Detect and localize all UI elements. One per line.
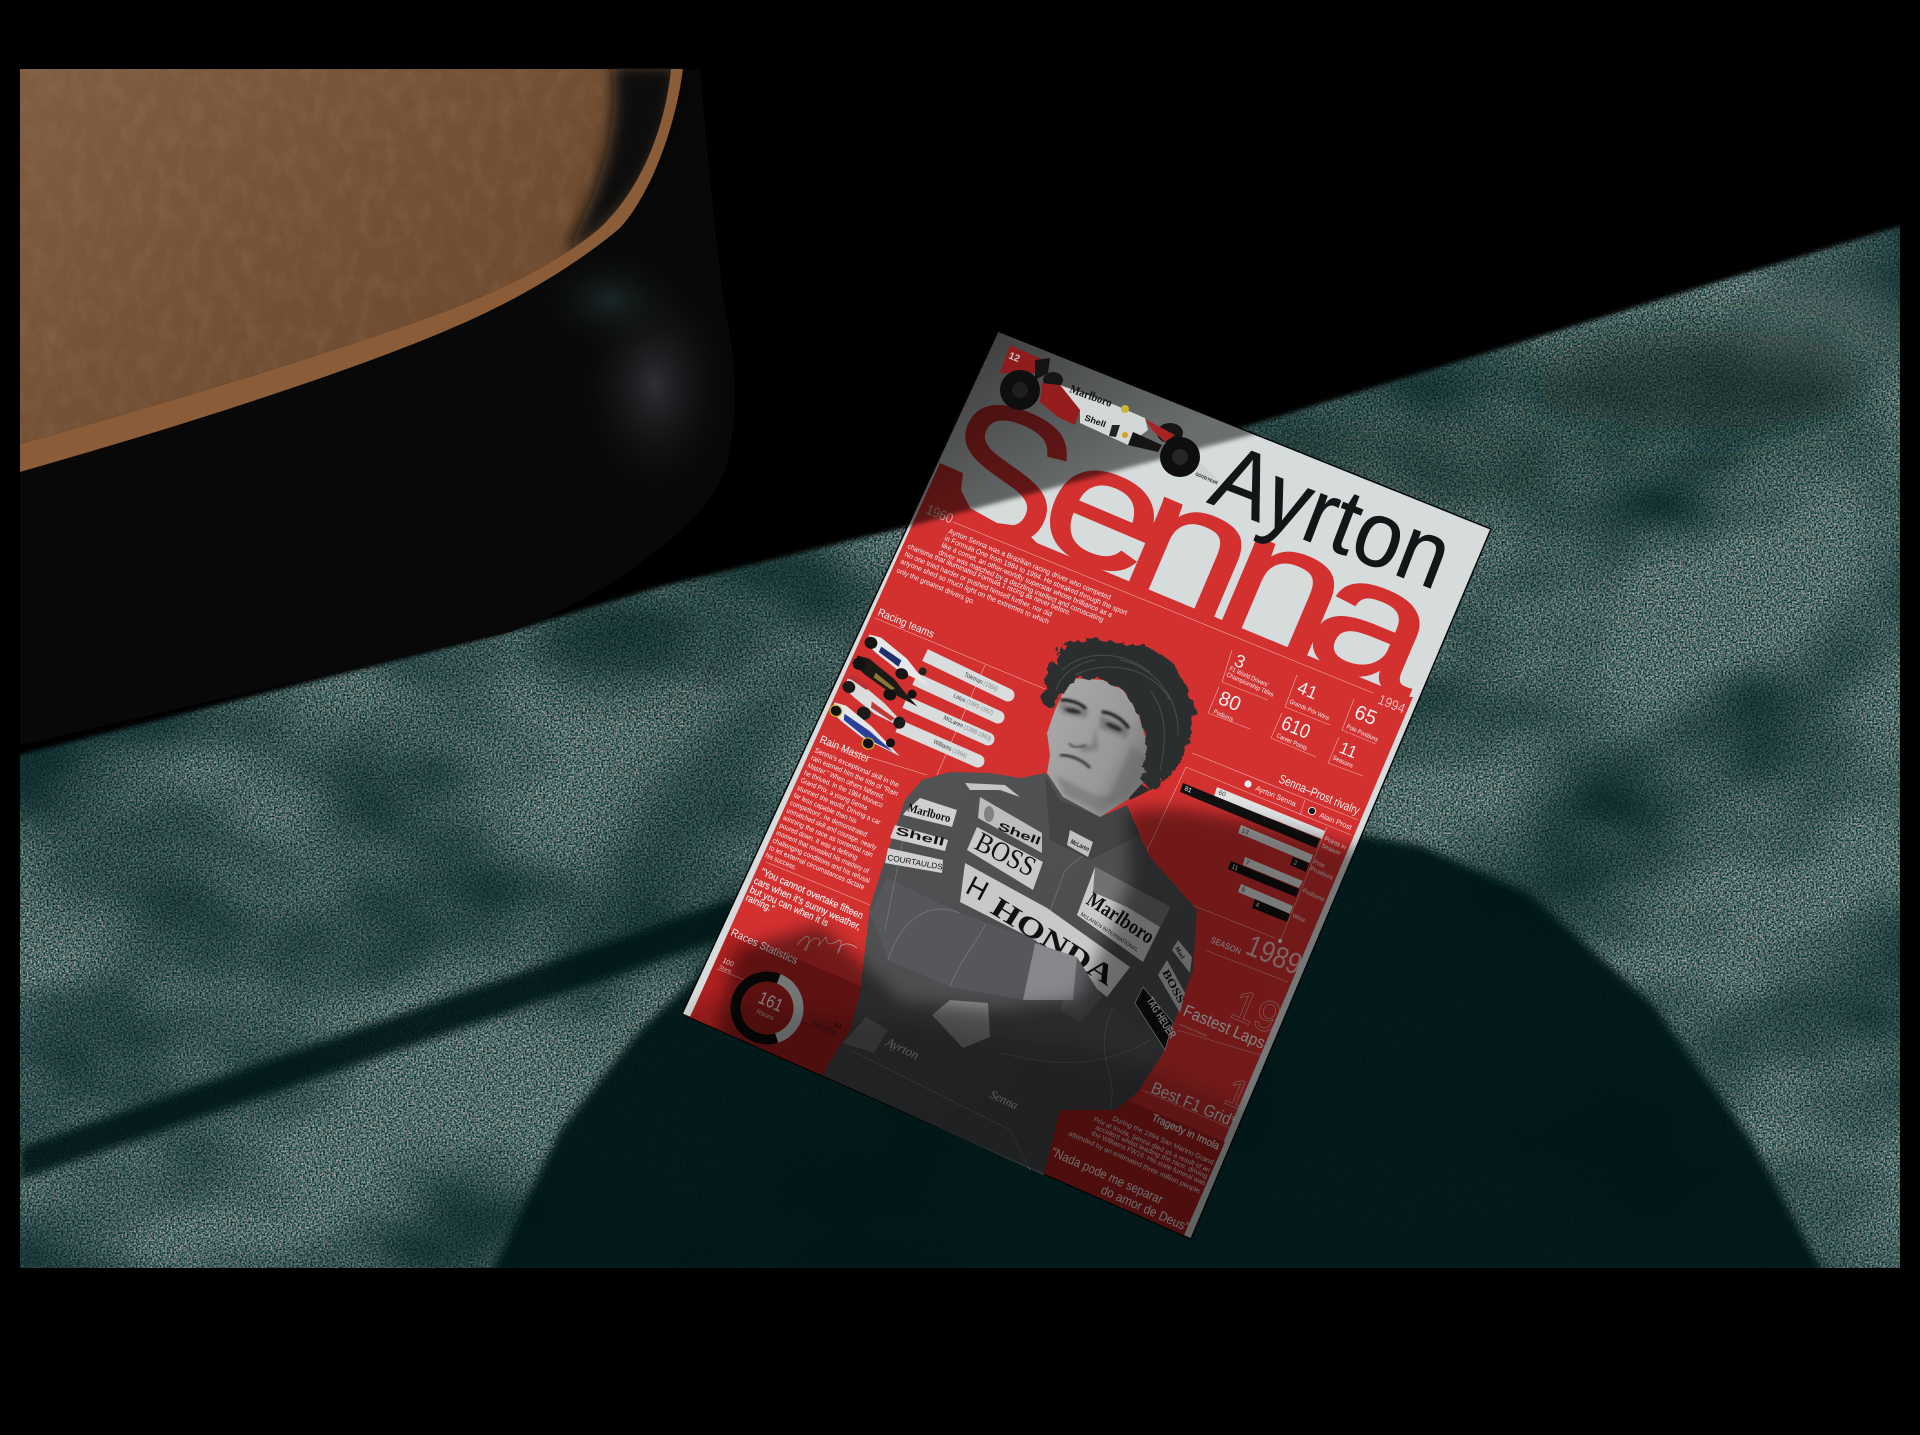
bars: pole positions: 13 bbox=[1240, 827, 1250, 837]
stat: pole positions: 65 bbox=[1351, 701, 1380, 730]
arm patch: Marlboro: Marl bbox=[1173, 946, 1185, 961]
stat: seasons: 11 bbox=[1336, 738, 1360, 762]
rain master text: challenging conditions and his refusal bbox=[771, 836, 872, 885]
donut chart: Races bbox=[755, 1008, 776, 1023]
pill labels: Toleman (1984) bbox=[963, 671, 999, 693]
rain master text: he thrived. In the 1984 Monaco bbox=[803, 768, 884, 810]
heading: races statistics: Races Statistics bbox=[729, 927, 800, 967]
best grid stat: Best F1 Grid* bbox=[1148, 1078, 1240, 1131]
shadow: upper dark area bbox=[0, 60, 1920, 760]
label: starts: 100 bbox=[721, 957, 735, 969]
stat: pole positions bbox=[1342, 699, 1380, 744]
bars: points in season: 81 bbox=[1183, 785, 1193, 795]
heading: tragedy in Imola: Tragedy in Imola bbox=[1150, 1112, 1221, 1152]
sleeve patch: Courtaulds bbox=[885, 848, 943, 873]
intro text: Ayrton Senna was a Brazilian racing driver who competed bbox=[947, 527, 1112, 602]
rain master text: far less capable than his bbox=[792, 791, 859, 826]
dark red lower band bbox=[690, 930, 1225, 1235]
embroidered name: Senna: Senna bbox=[988, 1087, 1020, 1112]
rain master text: rain earned him the title of "Rain bbox=[810, 753, 900, 798]
rain master text: moment that revealed his mastery of bbox=[775, 828, 870, 875]
sleeve patch: Marlboro: Marlboro bbox=[906, 800, 952, 825]
ear bbox=[1142, 744, 1172, 780]
stat: world titles: 3 bbox=[1231, 650, 1248, 673]
bars: podiums bbox=[1228, 857, 1325, 903]
suit cuff bbox=[1023, 943, 1077, 1000]
senna quote: raining." bbox=[744, 893, 776, 915]
best grid stat: 1 bbox=[1218, 1070, 1256, 1119]
sleeve patch: Shell bbox=[890, 825, 948, 851]
fastest laps stat: 19 bbox=[1224, 980, 1288, 1044]
intro text bbox=[895, 527, 1129, 626]
bars: pole positions: Pole bbox=[1312, 859, 1326, 870]
eyebrows bbox=[1062, 700, 1128, 727]
donut chart: 161 bbox=[755, 987, 786, 1016]
bars: pole positions: Positions bbox=[1309, 866, 1334, 882]
stat: pole positions: Pole Positions bbox=[1345, 723, 1379, 744]
McLaren F1 car illustration: GOODYEAR bbox=[1195, 471, 1219, 486]
shoulder stripe bbox=[965, 783, 1020, 797]
rain master text: Master." When others faltered, bbox=[806, 761, 886, 801]
poster sheet bbox=[681, 332, 1492, 1240]
timeline 1960 to 1994: 1994 bbox=[1376, 691, 1408, 717]
stat: world titles bbox=[1222, 650, 1275, 700]
bag tan leather top bbox=[20, 69, 671, 444]
chest patch: Marlboro: McLAREN INTERNATIONAL bbox=[1079, 912, 1139, 954]
bars: wins: Wins bbox=[1291, 913, 1306, 924]
racing teams section bbox=[820, 607, 1045, 775]
heading: racing teams: Racing teams bbox=[876, 607, 936, 641]
timeline 1960 to 1994 bbox=[924, 501, 1408, 717]
bars: points in season: Season bbox=[1320, 843, 1341, 857]
label: retirements: Retirements bbox=[812, 1020, 838, 1036]
rain master text bbox=[764, 746, 901, 892]
rain master section bbox=[744, 734, 901, 953]
intro text: anyone shed so much light on the extremes to which bbox=[899, 557, 1050, 626]
senna quote: cars when it's sunny weather, bbox=[752, 876, 862, 933]
car: Toleman bbox=[856, 632, 937, 691]
pill round ends bbox=[972, 688, 1014, 768]
car: Williams bbox=[821, 700, 910, 763]
lower arm bbox=[990, 1007, 1163, 1080]
neck collar bbox=[1045, 775, 1140, 860]
intro text: charisma that illuminated Formula 1 racing as never before. bbox=[906, 542, 1072, 617]
main wheels bbox=[1000, 370, 1040, 410]
shadow: diagonal bar across carpet bbox=[20, 897, 735, 1180]
belt badge bbox=[843, 1017, 888, 1053]
tragedy text: During the 1994 San Marino Grand bbox=[1111, 1115, 1215, 1167]
bars: podiums: 7 bbox=[1244, 859, 1251, 867]
nose bbox=[1069, 743, 1086, 747]
carpet floor bbox=[20, 224, 1900, 1268]
pill labels bbox=[932, 671, 999, 760]
arm patch: BOSS: BOSS bbox=[1159, 968, 1187, 1005]
stat: seasons: Seasons bbox=[1331, 754, 1354, 770]
suit stitching bbox=[850, 830, 1150, 1170]
label: retirements bbox=[803, 1020, 843, 1036]
stat: podiums: Podiums bbox=[1212, 708, 1234, 723]
legend bbox=[1244, 780, 1353, 832]
red panel bbox=[690, 463, 1413, 1235]
portuguese quote: do amor de Deus" bbox=[1099, 1182, 1192, 1235]
stat: grands prix wins: 41 bbox=[1294, 677, 1321, 703]
intro text: No one tried harder or pushed himself further, nor did bbox=[903, 550, 1054, 619]
portuguese quote: "Nada pode me separar bbox=[1049, 1144, 1166, 1207]
Senna-Prost rivalry chart bbox=[1145, 753, 1362, 943]
McLaren F1 car illustration bbox=[1000, 345, 1220, 486]
embroidered name: Ayrton: Ayrton bbox=[883, 1034, 921, 1062]
chest patch: HONDA bbox=[960, 863, 1130, 997]
rain master text: winning the race as torrential rain bbox=[781, 813, 875, 859]
glove bbox=[932, 1000, 990, 1048]
season 1989 label: 1989 bbox=[1241, 929, 1307, 982]
label: starts: Starts bbox=[718, 964, 733, 975]
shadow band over poster top bbox=[908, 332, 1257, 530]
bars: wins bbox=[1238, 884, 1306, 924]
hair strands bbox=[1056, 655, 1178, 770]
senna quote: but you can when it is bbox=[748, 885, 830, 929]
bars: podiums: Podiums bbox=[1301, 888, 1325, 903]
tragedy text: the Williams FW16. His state funeral was bbox=[1090, 1130, 1207, 1187]
shadow dome over poster bottom bbox=[710, 798, 1358, 1238]
rain master text: stunned the world. Driving a car bbox=[796, 783, 883, 827]
legend: Ayrton Senna bbox=[1254, 784, 1298, 809]
arm patch: TAG Heuer: TAG HEUER bbox=[1143, 995, 1178, 1041]
tragedy text: Prix at Imola, Senna died as a result of an bbox=[1092, 1116, 1211, 1175]
title: Senna: enna bbox=[1016, 397, 1467, 732]
arm patch: TAG Heuer bbox=[1135, 987, 1178, 1050]
portrait of Ayrton Senna bbox=[822, 638, 1197, 1175]
tragedy in Imola block bbox=[1049, 1112, 1221, 1235]
fastest laps stat bbox=[1177, 980, 1288, 1055]
pill labels: McLaren (1988-1993) bbox=[942, 714, 992, 743]
label: starts bbox=[717, 957, 745, 980]
stat: career points bbox=[1271, 712, 1316, 757]
bars: wins: 4 bbox=[1254, 901, 1261, 909]
bottom deeper shade bbox=[683, 997, 1246, 1238]
sleeve patch: Shell: Shell bbox=[894, 825, 946, 849]
stat: career points: Career Points bbox=[1275, 732, 1308, 752]
stat: seasons bbox=[1328, 737, 1363, 776]
rain master text: Senna's exceptional skill in the bbox=[813, 746, 901, 789]
mouth bbox=[1060, 755, 1090, 768]
fastest laps stat: Season with the most fastest laps bbox=[1179, 1022, 1208, 1038]
car: Lotus bbox=[844, 653, 927, 712]
bars: points in season: Points in bbox=[1323, 836, 1347, 851]
career stats grid bbox=[1208, 650, 1380, 776]
chest patch: Marlboro bbox=[1077, 867, 1170, 962]
far wheels bbox=[1043, 372, 1063, 388]
hair back bbox=[1120, 770, 1150, 800]
rain master text: unmatched skill and courage, nearly bbox=[785, 806, 878, 852]
bag piping bbox=[20, 69, 683, 472]
dark fold of leather bbox=[565, 64, 680, 254]
sleeve patch: Courtaulds: COURTAULDS bbox=[887, 853, 943, 872]
arm patch: Marlboro bbox=[1172, 940, 1192, 973]
intro text: only the greatest drivers go. bbox=[895, 566, 976, 606]
races statistics panel bbox=[717, 927, 843, 1040]
fastest laps stat: Fastest Laps bbox=[1180, 1001, 1268, 1053]
donut chart bbox=[736, 977, 799, 1040]
stat: world titles: F1 World Drivers' bbox=[1228, 665, 1269, 689]
bars: pole positions bbox=[1238, 825, 1334, 882]
stat: world titles: Championship Titles bbox=[1225, 671, 1275, 699]
rear wing bbox=[1000, 345, 1048, 373]
bars: points in season: 60 bbox=[1217, 789, 1227, 799]
leather bag bbox=[20, 68, 729, 652]
lighter crossed arm bbox=[870, 878, 1035, 1000]
face bbox=[1047, 678, 1150, 817]
crossed hand bbox=[1060, 957, 1102, 1023]
shadow: round dome on carpet bbox=[490, 810, 1825, 1275]
tragedy text: accident whilst leading the race, driving bbox=[1094, 1124, 1209, 1180]
legend: Alain Prost bbox=[1318, 811, 1353, 832]
chart title: Senna–Prost rivalry bbox=[1277, 772, 1362, 818]
face shading bbox=[1055, 702, 1148, 812]
chest patch: HONDA: H bbox=[961, 870, 994, 907]
chest patch: BOSS: BOSS bbox=[970, 827, 1041, 883]
goodyear fin bbox=[1195, 460, 1220, 482]
race suit bbox=[822, 772, 1197, 1175]
rain master text: competitors', he demonstrated bbox=[789, 798, 869, 839]
senna quote: "You cannot overtake fifteen bbox=[759, 867, 865, 922]
intro text: driver was matched by a dazzling intellect and coruscating bbox=[937, 548, 1105, 624]
McLaren F1 car illustration: Shell bbox=[1083, 412, 1107, 429]
car: McLaren bbox=[833, 672, 918, 739]
signature bbox=[797, 936, 857, 953]
season 1989 label: SEASON bbox=[1209, 935, 1243, 956]
chest patch: Shell bbox=[978, 797, 1042, 853]
eyes bbox=[1065, 707, 1123, 733]
poster paper bbox=[682, 331, 1491, 1239]
intro text: like a comet, an other-worldly superstar whose brilliance as a bbox=[940, 541, 1114, 620]
timeline 1960 to 1994: 1960 bbox=[924, 501, 956, 527]
tragedy text: attended by an estimated three million people. bbox=[1067, 1130, 1203, 1196]
stat: career points: 610 bbox=[1278, 712, 1313, 744]
stat: grands prix wins bbox=[1285, 675, 1330, 725]
label: retirements: 61 bbox=[833, 1021, 843, 1031]
stat: grands prix wins: Grands Prix Wins bbox=[1288, 698, 1330, 722]
chest patch: Marlboro: Marlboro bbox=[1082, 887, 1159, 949]
title: Senna: S bbox=[902, 352, 1103, 594]
rain master text: his success. bbox=[764, 851, 798, 872]
team pills bbox=[898, 655, 1008, 761]
bars: points in season bbox=[1180, 783, 1347, 857]
bars: wins: 6 bbox=[1240, 886, 1247, 894]
lighting on poster bbox=[683, 332, 1358, 1238]
bars: pole positions: 2 bbox=[1292, 859, 1299, 867]
bars: podiums: 11 bbox=[1230, 863, 1240, 873]
McLaren F1 car illustration: 12 bbox=[1007, 351, 1022, 365]
chest patch: Shell: Shell bbox=[996, 821, 1042, 848]
car sponsors: Marlboro bbox=[1068, 382, 1114, 410]
pill labels: Williams (1994) bbox=[932, 738, 968, 760]
pill labels: Lotus (1985-1987) bbox=[952, 692, 994, 717]
rain master text: to let external circumstances dictate bbox=[768, 843, 866, 892]
title: Ayrton: Ayrton bbox=[1199, 424, 1466, 609]
chest patch: McLaren badge: McLaren bbox=[1069, 838, 1090, 853]
chest patch: McLaren badge bbox=[1067, 830, 1093, 857]
car body bbox=[1060, 385, 1148, 445]
hair bbox=[1042, 638, 1195, 790]
rain master text: poured down. It was a defining bbox=[778, 821, 859, 862]
bag black body bbox=[420, 624, 528, 652]
intro text: in Formula One from 1984 to 1994. He streaked through the sport bbox=[943, 534, 1129, 617]
heading: rain master: Rain Master bbox=[818, 734, 872, 766]
season 1989 label bbox=[1192, 905, 1307, 982]
rain master text: Grand Prix, a young Senna bbox=[799, 776, 869, 812]
stat: podiums: 80 bbox=[1215, 687, 1244, 716]
chest patch: HONDA: HONDA bbox=[985, 892, 1121, 993]
arm patch: BOSS bbox=[1158, 960, 1187, 1013]
stat: podiums bbox=[1208, 687, 1250, 729]
